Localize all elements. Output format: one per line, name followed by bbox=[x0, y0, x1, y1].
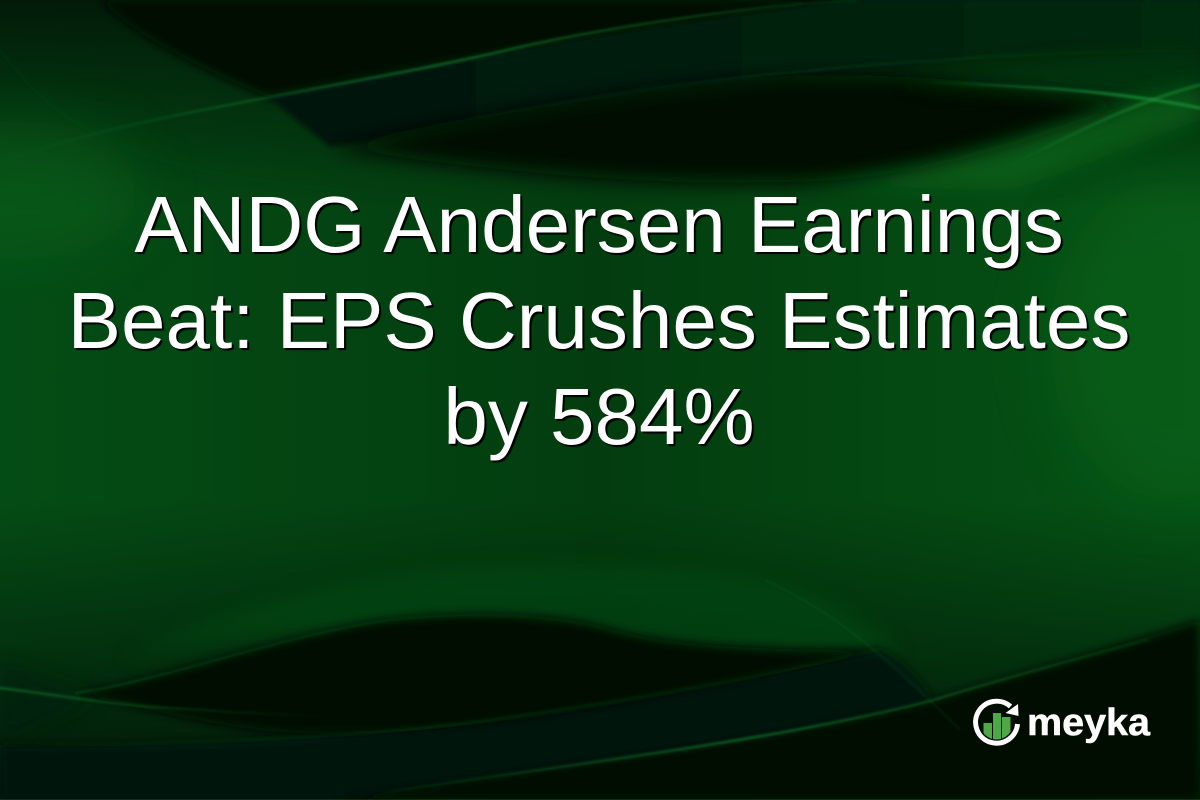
icon: circular arrow with bars bbox=[976, 701, 1018, 745]
wordmark: meyka bbox=[1027, 702, 1151, 744]
lower soft band bbox=[120, 564, 900, 700]
title: Beat: EPS Crushes Estimates bbox=[68, 276, 1130, 365]
title: ANDG Andersen Earnings bbox=[134, 180, 1064, 269]
title bbox=[68, 180, 1130, 463]
logo: meyka bbox=[973, 698, 1151, 746]
top right glow band bbox=[770, 85, 1200, 190]
bottom lens bbox=[76, 615, 880, 734]
mid glows bbox=[0, 120, 140, 260]
title: by 584% bbox=[443, 372, 755, 461]
top dark mass bbox=[100, 0, 857, 97]
bottom dark band and right side bbox=[0, 650, 933, 800]
top lens bbox=[330, 75, 1132, 182]
